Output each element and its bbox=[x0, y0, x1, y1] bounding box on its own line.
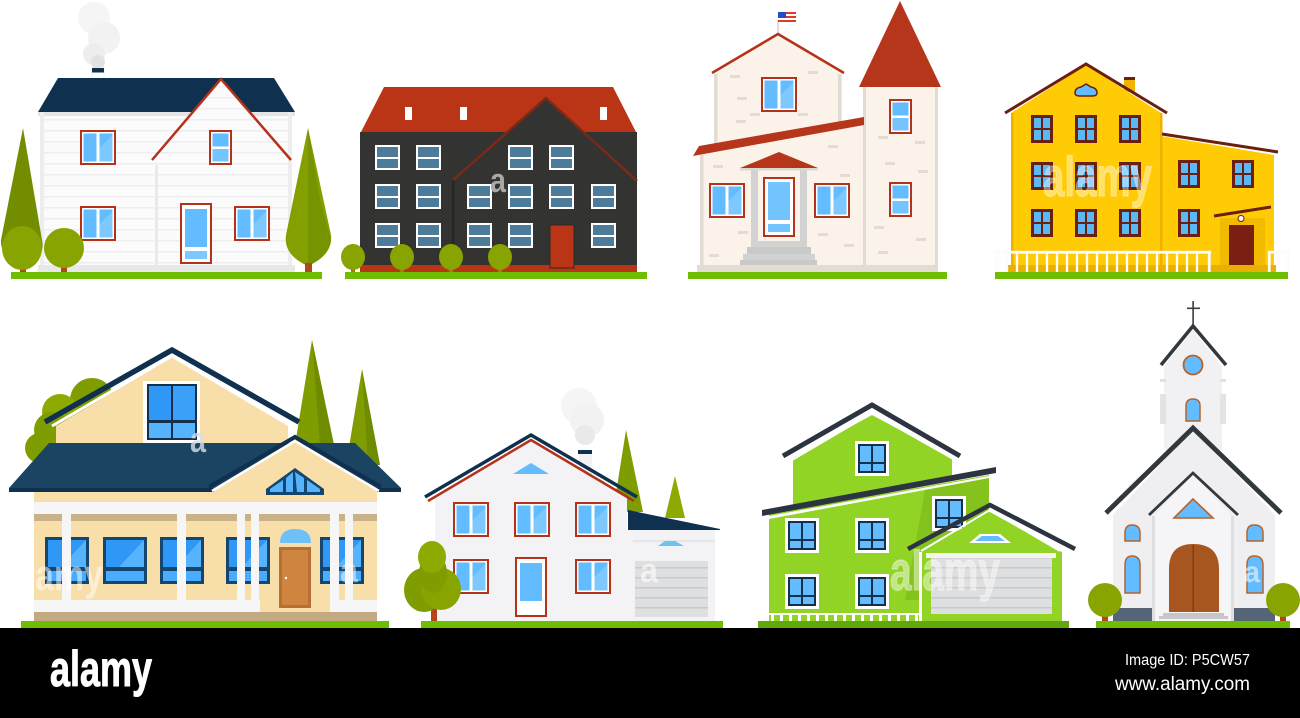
slanted roof bbox=[762, 467, 996, 519]
lower wall bbox=[34, 492, 377, 612]
porch bbox=[740, 152, 818, 247]
fan window bbox=[266, 468, 324, 495]
watermark a: a bbox=[1244, 556, 1260, 589]
top roof bbox=[783, 405, 960, 460]
ground bbox=[758, 621, 1069, 628]
chimney bbox=[578, 450, 592, 480]
white beam bbox=[34, 502, 377, 514]
ground bbox=[345, 272, 647, 279]
fence bbox=[996, 251, 1288, 272]
ground bbox=[21, 621, 389, 628]
door bbox=[763, 177, 795, 237]
conifers bbox=[295, 340, 380, 465]
url: www.alamy.com bbox=[1114, 674, 1250, 695]
entrance bbox=[1214, 207, 1271, 268]
house 1: white house with navy roof bbox=[1, 2, 331, 279]
watermark alamy: alamy bbox=[890, 539, 1000, 602]
door bbox=[515, 557, 547, 617]
smoke bbox=[561, 388, 604, 445]
gable bbox=[452, 98, 637, 265]
upper gable wall bbox=[56, 357, 288, 445]
upper window bbox=[143, 381, 200, 443]
footer bar bbox=[0, 628, 1300, 718]
roof bbox=[361, 87, 636, 132]
steps bbox=[1159, 613, 1228, 619]
main roof bbox=[9, 443, 401, 492]
annex bbox=[1161, 136, 1274, 265]
front gable bbox=[209, 437, 381, 501]
cross bbox=[1187, 301, 1200, 327]
conifers bbox=[613, 430, 685, 518]
windows bbox=[785, 441, 966, 609]
roof lines bbox=[425, 435, 637, 501]
windows bbox=[375, 145, 616, 248]
porch lower band bbox=[34, 600, 377, 612]
fence bbox=[769, 613, 920, 621]
garage bbox=[627, 510, 720, 621]
ground bbox=[11, 272, 322, 279]
steps bbox=[740, 247, 817, 266]
triangle window bbox=[1174, 499, 1213, 518]
watermark a: a bbox=[490, 162, 507, 200]
dormer chimneys bbox=[405, 107, 607, 120]
walls bbox=[360, 132, 637, 265]
base bbox=[697, 265, 938, 272]
ground bbox=[1096, 621, 1290, 628]
base bbox=[360, 265, 637, 273]
lower wall bbox=[700, 125, 864, 267]
base bbox=[1113, 608, 1275, 621]
house 5: beige house with porch bbox=[9, 340, 401, 628]
tree bbox=[404, 541, 461, 621]
windows bbox=[709, 77, 912, 218]
shaded side bbox=[905, 478, 989, 600]
garage block bbox=[908, 505, 1075, 622]
watermark a: a bbox=[640, 552, 659, 590]
house 7: green house with garage bbox=[758, 405, 1075, 628]
house 6: white house with garage bbox=[404, 388, 723, 628]
logo: alamy bbox=[50, 641, 152, 697]
top block bbox=[793, 415, 952, 505]
watermarks: a bbox=[190, 419, 207, 460]
house 3: cream house with tower bbox=[688, 1, 947, 279]
annex roof line bbox=[1162, 134, 1278, 152]
ground bbox=[421, 621, 723, 628]
church bbox=[1088, 301, 1300, 628]
flag bbox=[778, 12, 796, 33]
door bbox=[550, 225, 574, 268]
steeple bbox=[1160, 326, 1226, 450]
attic window bbox=[1075, 84, 1097, 96]
house 2: dark house with red roof bbox=[341, 87, 647, 279]
watermarks bbox=[35, 419, 359, 600]
main roof bbox=[1106, 428, 1281, 513]
watermark alamy: alamy bbox=[1043, 145, 1152, 208]
windows bbox=[80, 130, 270, 241]
columns bbox=[62, 514, 353, 602]
lower block bbox=[769, 475, 989, 621]
chimney bbox=[92, 68, 104, 84]
chimney bbox=[1124, 77, 1135, 92]
vent bbox=[513, 463, 549, 474]
base bbox=[34, 612, 377, 621]
base bbox=[1008, 265, 1276, 272]
windows bbox=[453, 502, 611, 594]
trees bbox=[1, 128, 331, 273]
watermarks: amy bbox=[35, 551, 103, 600]
bricks bbox=[709, 71, 928, 257]
watermarks: a bbox=[340, 552, 359, 590]
walls bbox=[40, 112, 292, 272]
door bbox=[279, 529, 311, 608]
smoke bbox=[78, 2, 120, 69]
door bbox=[180, 203, 212, 264]
front gable bbox=[152, 79, 291, 160]
bushes bbox=[1088, 583, 1300, 622]
door bbox=[1169, 544, 1219, 612]
porch windows bbox=[45, 537, 364, 584]
main block bbox=[1011, 65, 1161, 265]
roof bbox=[38, 78, 295, 112]
main gable walls bbox=[1113, 430, 1275, 621]
slanted roof bbox=[693, 117, 864, 156]
ground bbox=[688, 272, 947, 279]
upper gable block bbox=[712, 34, 844, 150]
upper gable roof bbox=[45, 350, 299, 426]
main roof line bbox=[1005, 64, 1167, 113]
bushes bbox=[341, 244, 512, 273]
central bay bbox=[1149, 473, 1238, 621]
tower bbox=[859, 1, 941, 265]
ground bbox=[995, 272, 1288, 279]
side windows bbox=[1125, 525, 1263, 593]
image id: Image ID: P5CW57 bbox=[1125, 652, 1250, 669]
walls bbox=[435, 440, 627, 621]
background bushes bbox=[25, 378, 114, 463]
windows bbox=[1031, 115, 1254, 237]
house 4: yellow house with fence bbox=[995, 64, 1288, 279]
